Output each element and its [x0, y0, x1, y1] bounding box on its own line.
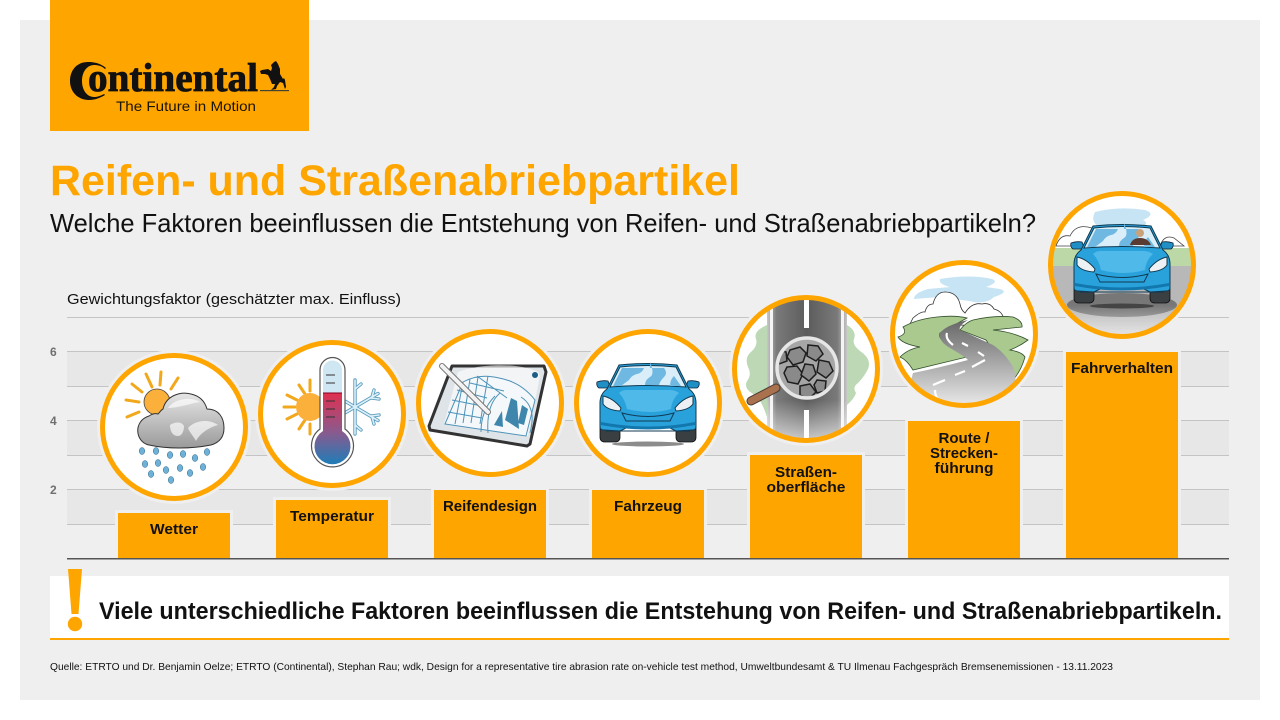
- bar: Fahrzeug: [589, 487, 707, 558]
- bar: Fahrverhalten: [1063, 349, 1181, 558]
- source note: Quelle: ETRTO und Dr. Benjamin Oelze; ETRTO (Continental), Stephan Rau; wdk, Design for a representative tire abrasion rate on-vehicle test method, Umweltbundesamt & TU Ilmenau Fachgespräch Bremsenemissionen - 13.11.2023: [50, 661, 1113, 673]
- icon: weather: [97, 350, 251, 504]
- y-axis values: 2: [50, 483, 57, 497]
- bar: Wetter: Wetter: [150, 521, 198, 538]
- chart axis title: Gewichtungsfaktor (geschätzter max. Einfluss): [67, 291, 401, 308]
- callout text: Viele unterschiedliche Faktoren beeinflussen die Entstehung von Reifen- und Straßenabriebpartikeln.: [99, 598, 1222, 625]
- icon: winding route: [887, 257, 1041, 411]
- bar: Reifendesign: [431, 487, 549, 558]
- logo wordmark: Continental: ontinental: [88, 55, 258, 100]
- subtitle: Welche Faktoren beeinflussen die Entstehung von Reifen- und Straßenabriebpartikeln?: [50, 208, 1036, 238]
- y-axis values: 4: [50, 414, 57, 428]
- bar: Reifendesign: Reifendesign: [443, 498, 537, 515]
- y-axis values: 6: [50, 345, 57, 359]
- bar: Wetter: [115, 510, 233, 558]
- y-axis values: [50, 345, 57, 497]
- bar: Temperatur: [273, 497, 391, 558]
- bar: Straßenoberfläche: [747, 452, 865, 558]
- logo tagline: The Future in Motion: [116, 98, 256, 114]
- callout: [50, 569, 1229, 640]
- icon: road surface magnifier: [729, 292, 883, 446]
- bar: Straßenoberfläche: oberfläche: [766, 479, 846, 496]
- icon: tire design tablet: [413, 326, 567, 480]
- bar: Route / Streckenführung: [905, 418, 1023, 558]
- bar: Fahrverhalten: Fahrverhalten: [1071, 360, 1173, 377]
- title: Reifen- und Straßenabriebpartikel: [50, 157, 740, 205]
- icon: rearing horse: [260, 61, 289, 91]
- icon: car front: [571, 326, 725, 480]
- bar: Fahrzeug: Fahrzeug: [614, 498, 682, 515]
- x-axis baseline: [67, 558, 1229, 560]
- bar: Route / Streckenführung: Route /: [938, 430, 990, 447]
- icon: exclamation mark: [68, 569, 82, 631]
- bar chart: [50, 291, 1229, 560]
- bar: Route / Streckenführung: Strecken-: [930, 445, 998, 462]
- icon: thermometer: [255, 337, 409, 491]
- bar: Straßenoberfläche: Straßen-: [775, 464, 837, 481]
- icon: car with driver: [1045, 188, 1199, 342]
- bar: Temperatur: Temperatur: [290, 508, 374, 525]
- bar: Route / Streckenführung: führung: [934, 460, 994, 477]
- logo block: [50, 0, 309, 131]
